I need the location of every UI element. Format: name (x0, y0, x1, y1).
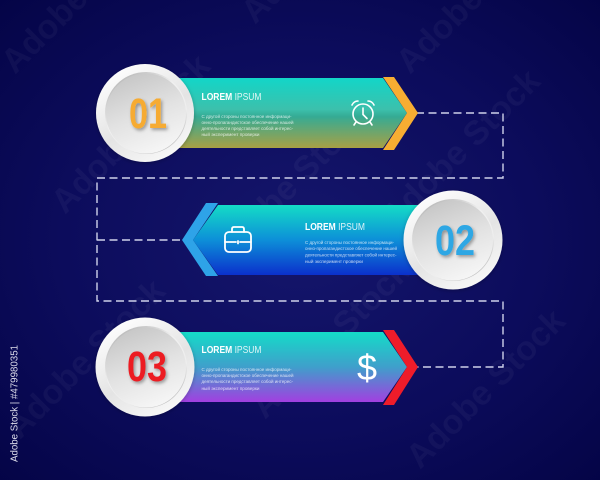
body text 3: С другой стороны постоянное информаци- (202, 366, 292, 373)
watermark: Adobe Stock (399, 302, 573, 476)
heading 2: LOREM IPSUM (305, 221, 365, 233)
body text 2: ный эксперимент проверки (305, 258, 363, 265)
chevron 1 (383, 77, 418, 150)
panel: step 3 (96, 318, 418, 416)
body text 1: онно-пропагандистское обеспечение нашей (202, 119, 294, 126)
body text 3: ный эксперимент проверки (202, 385, 260, 392)
icon: briefcase (225, 227, 251, 252)
band 2 (193, 205, 460, 275)
number 03: 03 (127, 343, 167, 391)
body text 2: деятельности представляет собой интерес- (305, 252, 397, 258)
watermark: Adobe Stock (44, 47, 218, 221)
body text 1 (202, 113, 294, 138)
band 1 (170, 78, 407, 148)
icon: alarm clock (352, 101, 374, 125)
body text 3 (202, 366, 294, 392)
number 02: 02 (435, 217, 475, 265)
body text 2: онно-пропагандистское обеспечение нашей (305, 245, 397, 252)
circle badge 1 (96, 64, 194, 162)
icon: dollar sign: $ (357, 347, 377, 388)
circle badge 3 (96, 318, 194, 416)
watermark: Adobe Stock (374, 62, 548, 236)
band 3 (170, 332, 407, 402)
heading 3: LOREM IPSUM (202, 344, 262, 356)
number 01: 01 (129, 90, 167, 138)
stock id label: Adobe Stock | #479980351 (10, 345, 20, 462)
dashed connectors (97, 113, 503, 367)
chevron 3 (383, 330, 418, 405)
body text 1: деятельности представляет собой интерес- (202, 125, 293, 132)
chevron 2 (182, 203, 218, 276)
watermark: Adobe Stock (0, 272, 173, 446)
body text 1: ный эксперимент проверки (202, 131, 260, 138)
body text 3: деятельности представляет собой интерес- (202, 378, 293, 385)
circle badge 2 (404, 190, 502, 290)
watermark: Adobe Stock (204, 97, 378, 271)
heading 1: LOREM IPSUM (202, 91, 262, 103)
body text 2 (305, 239, 397, 265)
body text 3: онно-пропагандистское обеспечение нашей (202, 372, 294, 379)
body text 2: С другой стороны постоянное информаци- (305, 239, 394, 246)
panel: step 2 (182, 190, 502, 290)
panel: step 1 (96, 64, 418, 162)
body text 1: С другой стороны постоянное информаци- (202, 113, 292, 120)
watermark: Adobe Stock (244, 252, 418, 426)
